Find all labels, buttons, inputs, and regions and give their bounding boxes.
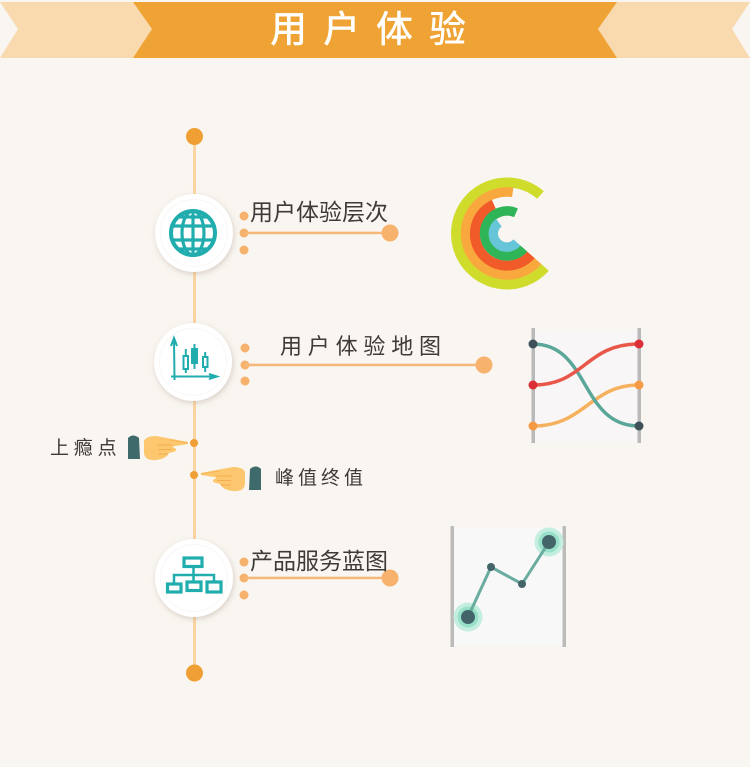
- icon: globe: [155, 194, 233, 272]
- label: 峰值终值: [275, 467, 367, 489]
- icon: pointing hand left: [201, 466, 261, 491]
- connector dots and line: [240, 212, 398, 254]
- item 2: user experience map: [154, 323, 644, 443]
- label: 产品服务蓝图: [250, 548, 388, 574]
- label: 用户体验层次: [250, 199, 388, 225]
- label: 用户体验地图: [280, 334, 447, 359]
- icon: candlestick chart: [154, 323, 232, 401]
- label: 上瘾点: [50, 437, 121, 459]
- icon: pointing hand right: [128, 436, 188, 460]
- dot: [190, 439, 198, 447]
- timeline: [186, 128, 203, 682]
- dot: [190, 471, 198, 479]
- callout: peak-end value: [190, 466, 367, 491]
- item 3: service blueprint: [155, 526, 566, 647]
- chart: concentric rings: [456, 182, 545, 284]
- connector dots and line: [240, 344, 492, 386]
- chart: line chart: [450, 526, 566, 647]
- icon: org chart: [155, 539, 233, 617]
- title banner: [0, 2, 750, 58]
- connector dots and line: [240, 558, 398, 600]
- chart: crossing curves: [528, 328, 644, 443]
- item 1: user experience levels: [155, 182, 545, 284]
- title: 用户体验: [270, 9, 482, 50]
- callout: addiction point: [50, 436, 198, 460]
